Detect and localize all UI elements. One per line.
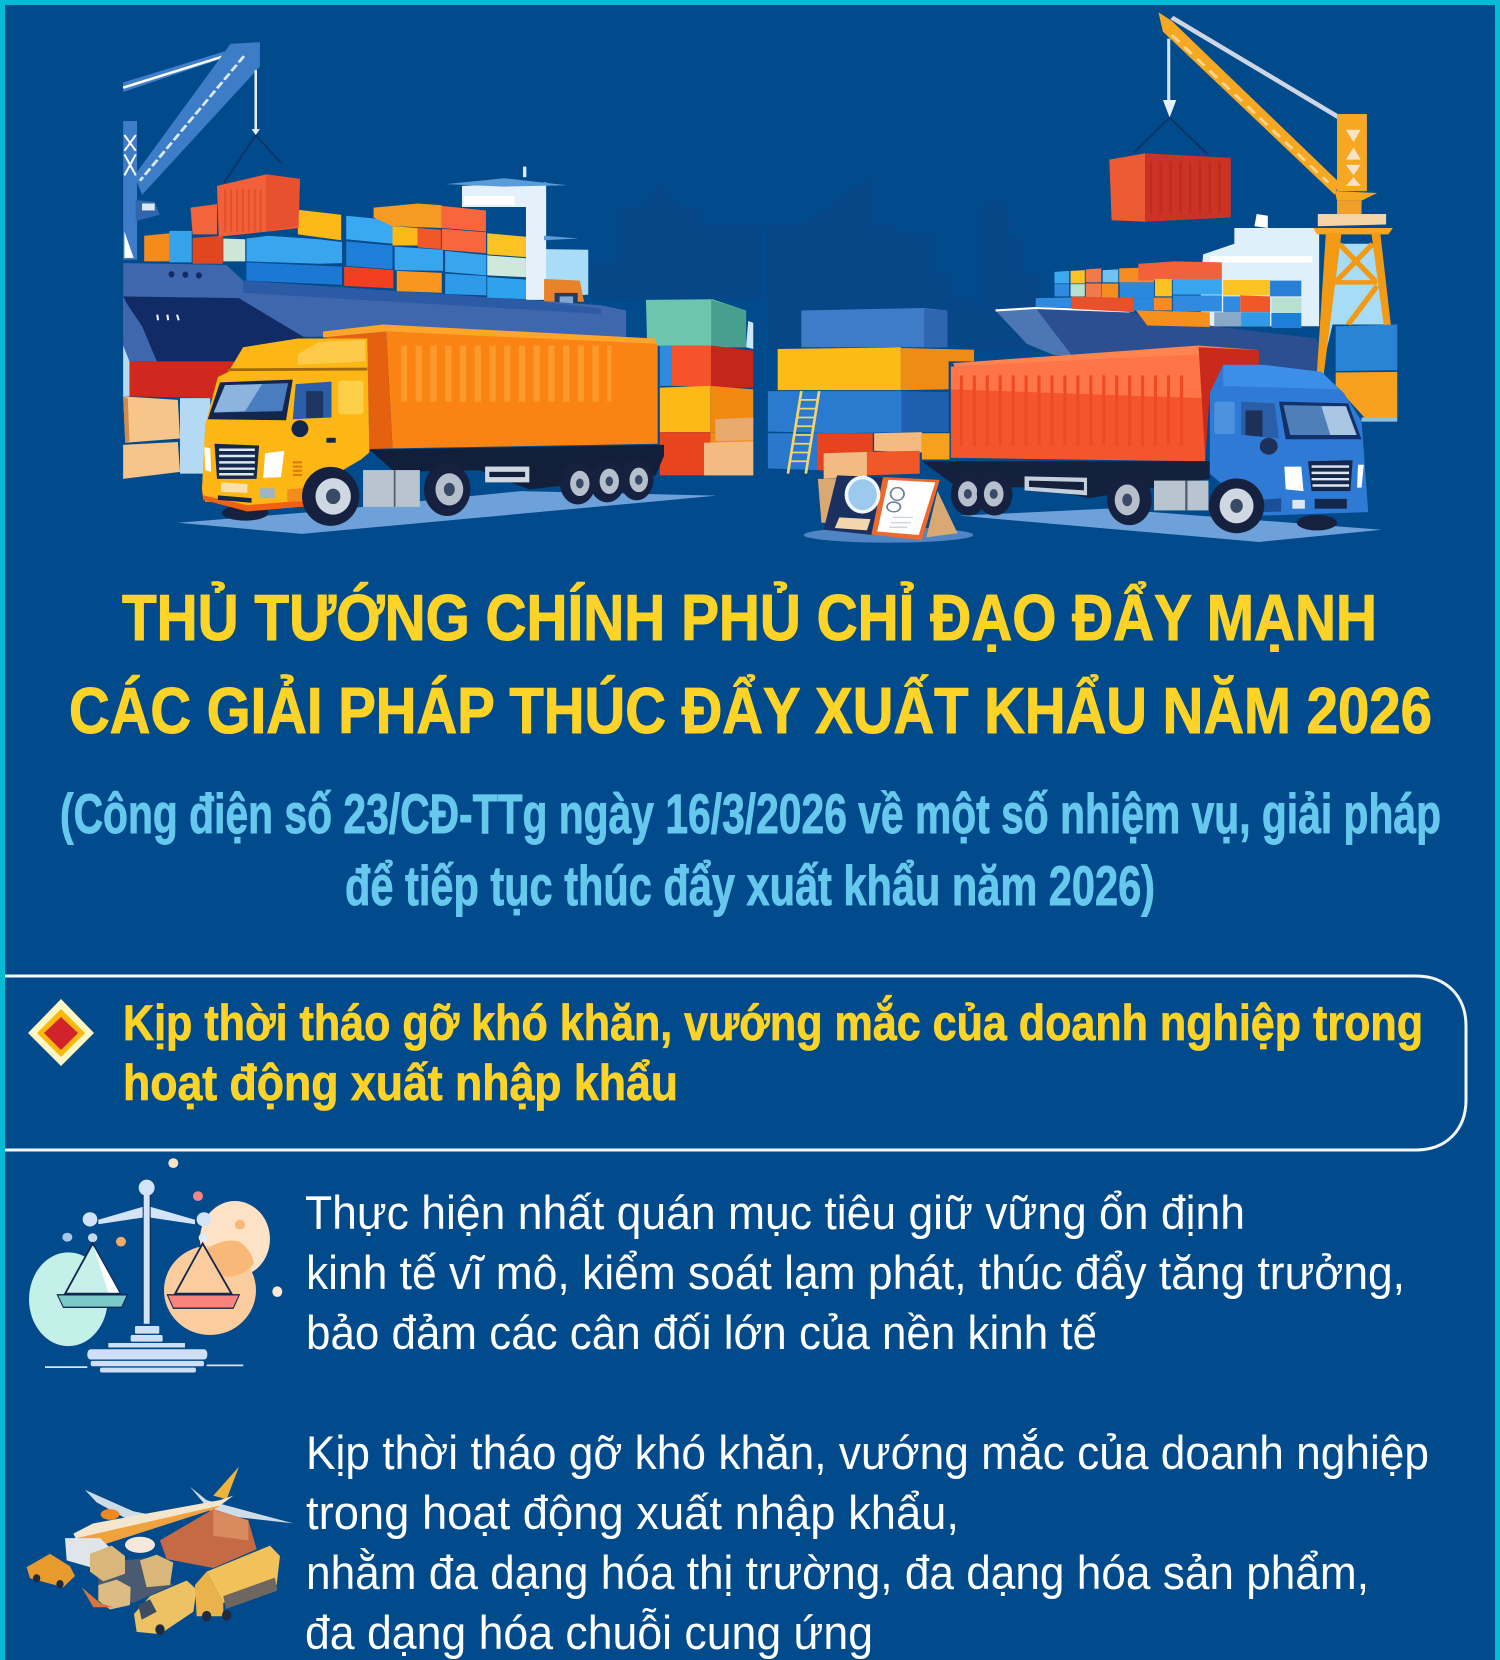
stacked containers and boxes (123, 299, 753, 479)
text block: second solution: đa dạng hóa chuỗi cung ứng (305, 1606, 873, 1659)
text block: first solution (305, 1186, 1405, 1359)
icon: diamond bullet (28, 999, 94, 1066)
text block: second solution: trong hoạt động xuất nhập khẩu, (306, 1486, 959, 1539)
subtitle: để tiếp tục thúc đẩy xuất khẩu năm 2026) (345, 854, 1155, 917)
subtitle (60, 782, 1441, 917)
hanging red container (1109, 153, 1231, 222)
illustration: port scene left (123, 42, 761, 534)
icon: blue crane (123, 42, 281, 260)
text block: first solution: Thực hiện nhất quán mục tiêu giữ vững ổn định (305, 1186, 1245, 1239)
ship hull (123, 263, 626, 474)
text block: first solution: bảo đảm các cân đối lớn của nền kinh tế (306, 1306, 1097, 1359)
shipping containers on deck (144, 174, 526, 299)
icon: blue truck (922, 346, 1382, 542)
ship with containers (996, 214, 1324, 375)
icon: orange truck (178, 324, 717, 534)
callout text: hoạt động xuất nhập khẩu (123, 1055, 678, 1111)
title (69, 581, 1432, 747)
icon: orange crane (1134, 12, 1393, 375)
ship superstructure (446, 167, 588, 312)
icon: balance scale (29, 1158, 282, 1372)
text block: second solution (305, 1426, 1429, 1659)
callout text (123, 995, 1423, 1111)
text block: second solution: Kịp thời tháo gỡ khó khăn, vướng mắc của doanh nghiệp (306, 1426, 1429, 1479)
text block: second solution: nhằm đa dạng hóa thị trường, đa dạng hóa sản phẩm, (306, 1546, 1369, 1599)
stacked containers left (768, 308, 974, 479)
icon: plane and cargo logistics (27, 1467, 293, 1635)
illustration: port scene right (768, 12, 1397, 543)
stacked containers right (1336, 324, 1397, 422)
text block: first solution: kinh tế vĩ mô, kiểm soát lạm phát, thúc đẩy tăng trưởng, (306, 1246, 1405, 1299)
clipboard with magnifier (804, 475, 973, 543)
callout panel (5, 976, 1466, 1150)
